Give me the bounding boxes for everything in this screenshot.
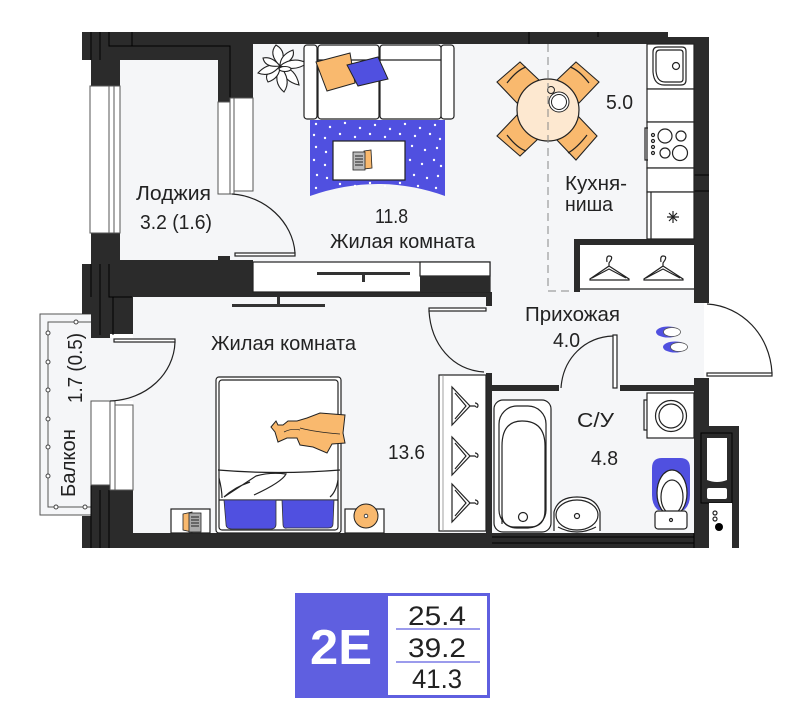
kitchen counter [645,44,694,239]
door: bathroom [561,335,617,388]
icon: tv upper [317,272,410,282]
panel: balcony [40,314,92,515]
rug [310,120,445,196]
label: bathroom area: 4.8 [591,448,618,470]
icon: hanger 1 [452,387,470,425]
blanket cloth [271,413,345,453]
label: loggia area: 3.2 (1.6) [140,212,212,234]
meters [709,503,732,548]
icon: hanger 2 [644,256,683,280]
total with balcony value: 41.3 [412,664,462,694]
label: kitchen area: 5.0 [606,92,633,114]
window: loggia left [90,86,120,233]
window: loggia right [218,98,253,194]
door: entrance [707,304,772,376]
icon: hanger 2 [452,437,470,475]
label: bedroom area: 13.6 [388,442,425,464]
icon: bathtub [494,400,551,532]
door: loggia [232,194,295,256]
label: balcony area: 1.7 (0.5) [65,333,87,403]
nightstand right [345,504,384,533]
table top [517,79,579,141]
living area value: 25.4 [408,601,466,631]
badge: apartment type and areas [295,593,490,698]
label: living area: 11.8 [375,206,408,228]
chairs [497,62,599,160]
icon: hanger 3 [452,484,470,522]
label: kitchen: Кухня- [565,173,627,195]
dining set [497,62,599,160]
label: loggia: Лоджия [136,183,211,205]
coffee table [333,141,405,180]
walls [82,32,739,548]
icon: slippers [656,326,688,352]
icon: toilet [652,458,690,529]
door: bedroom [429,308,486,372]
type code: 2E [310,621,372,675]
panel: interior floor [91,44,704,533]
icon: plate [549,92,569,112]
bed [216,377,345,533]
icon: plant [258,45,307,92]
icon: hob [647,122,694,168]
icon: orange pillow [316,53,355,91]
label: living room: Жилая комната [330,231,476,253]
icon: book [364,150,372,169]
label: kitchen 2: ниша [565,194,614,216]
icon: tv lower [232,297,325,307]
total area value: 39.2 [408,633,466,663]
kitchen zone dashed line [548,44,574,291]
window: bedroom [91,401,133,490]
icon: sink [653,47,686,85]
closet hall [580,245,694,289]
wardrobe bedroom [439,375,486,531]
shaft box [701,433,732,548]
label: hall area: 4.0 [553,330,580,352]
label: balcony: Балкон [58,429,80,497]
pillows [224,500,276,529]
tv unit [253,262,490,292]
icon: wash basin [554,497,600,532]
nightstand left [171,509,210,533]
icon: hanger 1 [590,256,629,280]
label: hall: Прихожая [525,304,620,326]
label: bedroom: Жилая комната [211,333,357,355]
icon: washing machine [644,393,694,438]
door: balcony [110,339,175,401]
fridge [647,192,694,239]
sofa [304,45,454,119]
icon: blue pillow [347,57,388,86]
label: bathroom: С/У [577,410,614,432]
